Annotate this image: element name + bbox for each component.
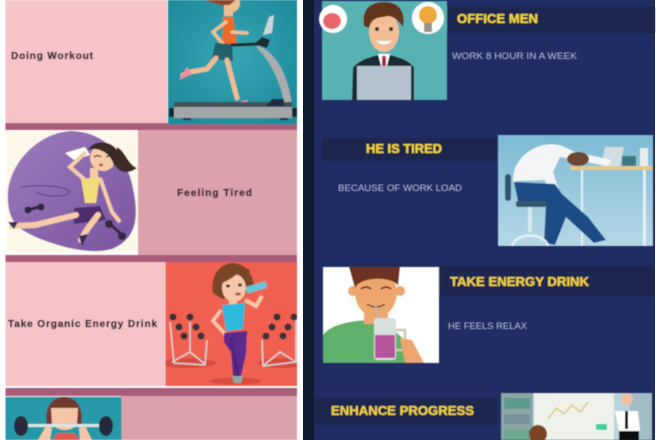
row 1 text panel: doing workout xyxy=(6,0,168,123)
divider bar 3 xyxy=(6,388,297,396)
row 3 text panel: take organic energy drink xyxy=(6,262,166,386)
header band: he is tired: HE IS TIRED xyxy=(366,142,442,156)
text: he feels relax: HE FEELS RELAX xyxy=(448,321,527,331)
row 3 text panel: take organic energy drink: Take Organic Energy Drink xyxy=(8,319,157,330)
icon: woman lifting barbell xyxy=(6,397,122,440)
icon: tired woman sitting with towel xyxy=(6,131,138,252)
header band: enhance progress xyxy=(314,398,497,425)
panel: right navy dark side strip xyxy=(303,0,314,440)
icon: office man with laptop xyxy=(319,1,447,100)
icon: man asleep on desk xyxy=(498,135,653,246)
row 2 text panel: feeling tired: Feeling Tired xyxy=(177,188,252,199)
icon: woman drinking water in gym xyxy=(160,262,306,386)
row 1 text panel: doing workout: Doing Workout xyxy=(11,51,94,62)
divider bar 1 xyxy=(6,123,297,130)
row 2 text panel: feeling tired xyxy=(138,130,297,255)
header band: he is tired xyxy=(322,138,497,161)
text: work hours: WORK 8 HOUR IN A WEEK xyxy=(452,51,577,61)
header band: office men xyxy=(447,7,655,33)
header band: take energy drink: TAKE ENERGY DRINK xyxy=(450,274,590,289)
row 4 text panel: empty pink xyxy=(121,396,297,440)
icon: woman running on treadmill xyxy=(168,0,297,124)
icon: man drinking energy drink xyxy=(323,267,439,363)
header band: office men: OFFICE MEN xyxy=(457,12,538,26)
header band: enhance progress: ENHANCE PROGRESS xyxy=(331,403,474,418)
panel: left workout story xyxy=(6,0,306,440)
header band: take energy drink xyxy=(440,266,654,296)
icon: presenter with chart in office xyxy=(501,393,652,440)
text: because of work load: BECAUSE OF WORK LOAD xyxy=(338,183,463,193)
panel: right office story background xyxy=(314,0,655,440)
divider bar 2 xyxy=(6,255,297,262)
